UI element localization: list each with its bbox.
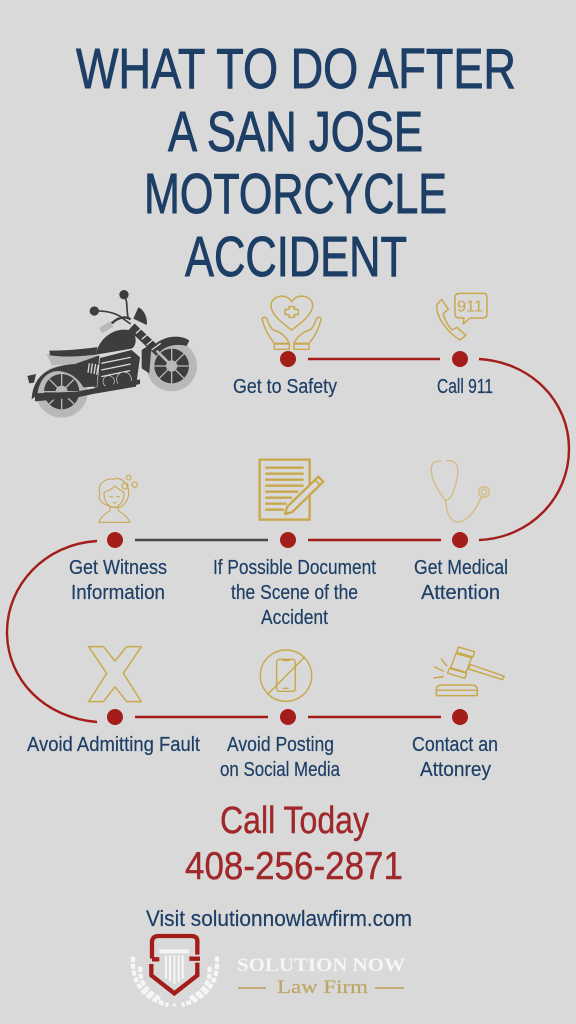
connector: route lines [7, 359, 569, 722]
marker dot [280, 351, 296, 367]
step: get witness information [69, 475, 167, 604]
label [213, 556, 376, 629]
step: contact an attorney [412, 647, 504, 781]
logo subtitle: Law Firm [277, 977, 368, 998]
label: Call 911 [437, 375, 493, 398]
label [220, 733, 340, 781]
label [414, 556, 508, 604]
icon: shield with column and laurel [133, 936, 217, 1007]
icon: gavel [434, 647, 504, 696]
call to action: Call Today [220, 800, 369, 842]
title [76, 37, 516, 289]
label: on Social Media [220, 758, 340, 781]
label: Avoid Posting [227, 733, 334, 756]
label [412, 733, 498, 781]
marker dot [107, 532, 123, 548]
icon: heart in hands [262, 296, 321, 349]
label: Get Witness [69, 556, 167, 579]
label: Avoid Admitting Fault [27, 733, 200, 756]
label: Attonrey [420, 758, 492, 781]
icon: woman remembering [99, 475, 137, 522]
marker dot [452, 532, 468, 548]
step: call 911 [437, 293, 493, 398]
label: Accident [261, 606, 328, 629]
step: avoid posting on social media [220, 650, 340, 781]
marker dot [107, 709, 123, 725]
icon: no phone [260, 650, 312, 701]
title: MOTORCYCLE [144, 162, 447, 226]
step: document the scene [213, 460, 376, 629]
logo: Solution Now Law Firm [133, 936, 405, 1007]
label: Attention [421, 581, 500, 604]
icon: document and pencil [260, 460, 323, 520]
label: If Possible Document [213, 556, 376, 579]
marker dot [280, 532, 296, 548]
call to action: 408-256-2871 [185, 845, 403, 888]
label: Get Medical [414, 556, 508, 579]
title: A SAN JOSE [168, 100, 423, 164]
marker dot [280, 709, 296, 725]
logo name: SOLUTION NOW [237, 955, 405, 976]
step: get to safety [233, 296, 338, 398]
step: avoid admitting fault [27, 647, 200, 756]
label: Information [71, 581, 165, 604]
icon: stethoscope [431, 461, 489, 522]
label [69, 556, 167, 604]
icon: outlined X [89, 647, 141, 702]
icon: phone with 911 bubble: 911 [457, 298, 483, 315]
website: Visit solutionnowlawfirm.com [146, 906, 412, 931]
marker dot [452, 351, 468, 367]
step: get medical attention [414, 461, 508, 604]
label: Get to Safety [233, 375, 338, 398]
title: ACCIDENT [185, 225, 407, 289]
call to action [185, 800, 403, 888]
label: the Scene of the [231, 581, 358, 604]
marker dot [452, 709, 468, 725]
icon: motorcycle [27, 290, 197, 418]
label: Contact an [412, 733, 498, 756]
